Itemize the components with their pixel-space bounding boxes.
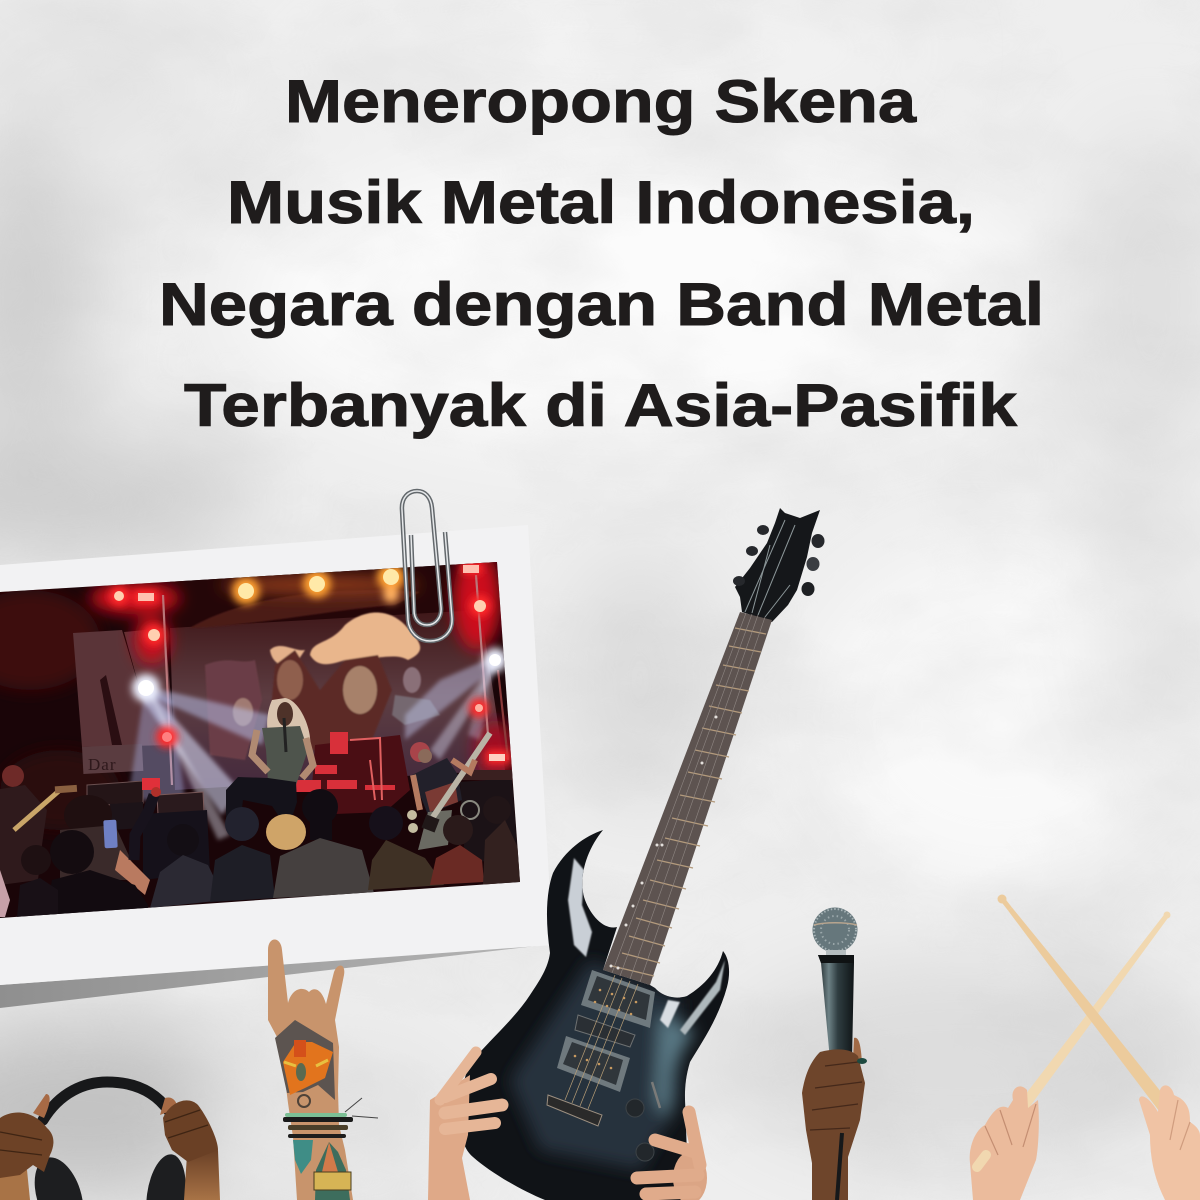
bracelets [283, 1098, 378, 1138]
arm tattoos [293, 1140, 351, 1200]
guitarist right [410, 733, 490, 850]
stage backdrop banner [170, 605, 505, 790]
title: Meneropong Skena [285, 68, 917, 135]
left hand [0, 1094, 53, 1200]
guitar [450, 508, 824, 1200]
paperclip [402, 491, 452, 641]
spotlight beams [128, 656, 497, 840]
title: Musik Metal Indonesia, [227, 169, 975, 236]
dark red wall [0, 590, 120, 830]
right hand [160, 1097, 220, 1200]
stage lights [109, 562, 510, 764]
guitarist left [0, 765, 77, 885]
hand tattoo [275, 1020, 335, 1107]
guitar body [464, 830, 730, 1200]
microphone with hand [802, 908, 867, 1200]
headstock [733, 508, 824, 622]
hand: rock sign with tattoo [268, 940, 378, 1200]
polaroid card [0, 525, 553, 1008]
concert photo [0, 550, 530, 925]
banner artwork [190, 590, 440, 770]
logo letter on banner: Dar [88, 755, 116, 774]
hand: guitar left [428, 1052, 502, 1200]
hand: drumstick right [1139, 1085, 1200, 1200]
logo letter on banner [73, 628, 175, 774]
neck and fretboard [603, 612, 772, 985]
pickups and hardware [547, 970, 660, 1161]
drum kit [295, 732, 410, 815]
red stage glow [90, 550, 515, 780]
truss poles [163, 575, 508, 785]
singer [226, 698, 313, 830]
crowd silhouettes [0, 787, 520, 917]
drumsticks [972, 894, 1170, 1171]
headphones with hands [0, 1082, 220, 1200]
amps [87, 770, 518, 880]
title [159, 68, 1044, 439]
title: Negara dengan Band Metal [159, 271, 1044, 338]
hand: drumstick left [970, 1086, 1039, 1200]
hand: guitar right [637, 1112, 707, 1200]
title: Terbanyak di Asia-Pasifik [184, 372, 1018, 439]
